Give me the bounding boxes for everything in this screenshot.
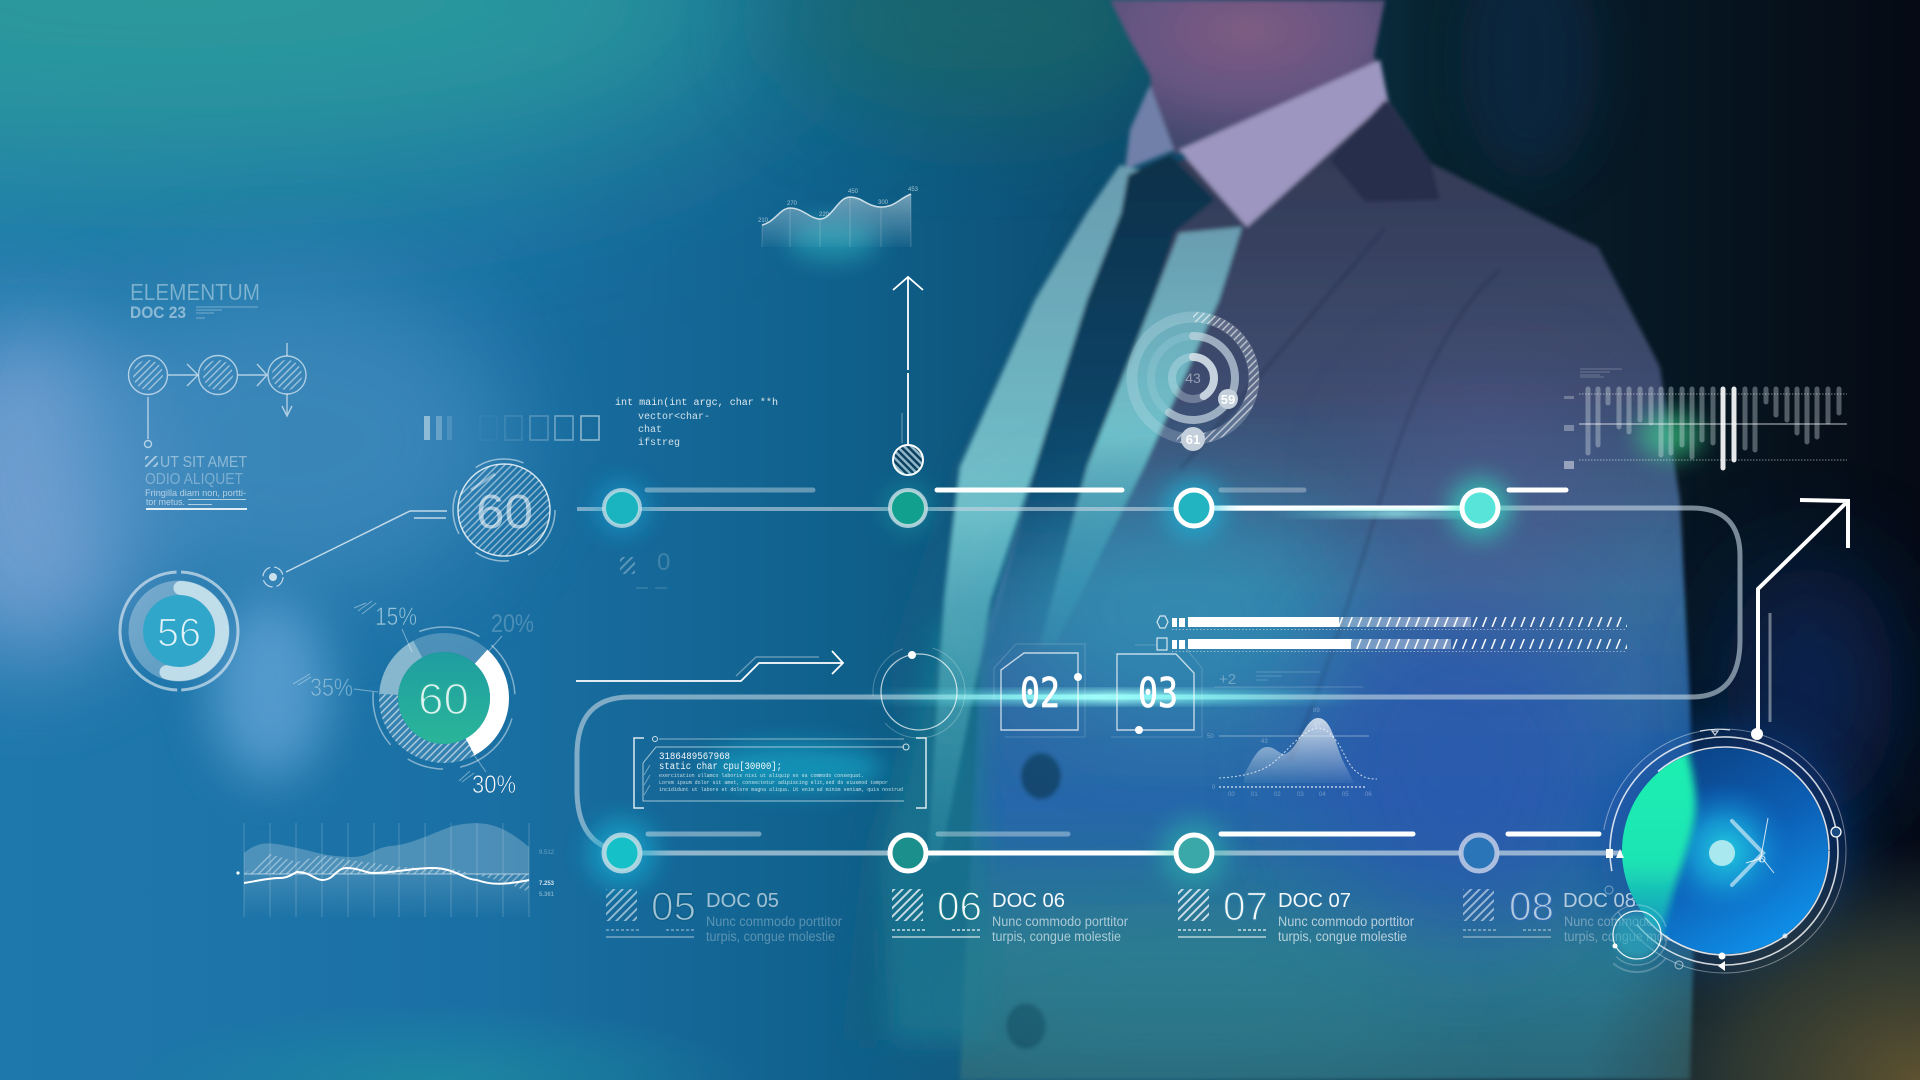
area line chart lower left: 9.512 bbox=[539, 850, 555, 856]
timeline node bottom 8 bbox=[1461, 835, 1497, 871]
node glows bbox=[588, 478, 1510, 887]
heading: ELEMENTUM DOC 23 bbox=[130, 279, 260, 322]
line chart top: 210 bbox=[758, 218, 769, 224]
faint +2 indicator bbox=[1214, 671, 1363, 688]
mountain chart: 03 bbox=[1297, 792, 1304, 798]
mountain chart: 43 bbox=[1261, 739, 1268, 745]
light overlays on suit bbox=[920, 380, 1920, 1080]
code panel: static char cpu: Lorem ipsum dolor sit amet, consectetur adipiscing elit,sed do eiusmod tempor bbox=[659, 780, 888, 786]
timeline node bottom 5 bbox=[604, 835, 640, 871]
code panel: static char cpu: 3186489567968 bbox=[659, 752, 730, 763]
line chart top: 453 bbox=[908, 187, 919, 193]
doc 08 label: Nunc commodo porttitor bbox=[1564, 914, 1700, 929]
heading: ELEMENTUM DOC 23: DOC 23 bbox=[130, 303, 186, 322]
text block: UT SIT AMET: tor metus. bbox=[146, 497, 185, 508]
gauge: 60 hatched with leader line bbox=[263, 459, 555, 587]
radial gauge: 43 59 61: 61 bbox=[1186, 432, 1200, 447]
doc 08 label: turpis, congue molestie bbox=[1564, 929, 1693, 944]
radial gauge: 43 59 61: 43 bbox=[1185, 370, 1201, 386]
gauge: 60 hatched with leader line: 60 bbox=[476, 486, 533, 539]
small lens bubble bbox=[1585, 883, 1689, 987]
lens green reflection bbox=[1622, 753, 1702, 934]
text block: UT SIT AMET: ODIO ALIQUET bbox=[145, 471, 243, 488]
line chart top: 270 bbox=[787, 201, 798, 207]
dial: big lens disc bbox=[1603, 728, 1846, 974]
doc 06 label: turpis, congue molestie bbox=[992, 929, 1121, 944]
code snippet: int main: ifstreg bbox=[638, 437, 680, 449]
lapel edge bbox=[1180, 228, 1500, 760]
mountain chart: 00 bbox=[1228, 792, 1235, 798]
track highlight bottom bbox=[908, 850, 1194, 856]
mountain chart: 06 bbox=[1365, 792, 1372, 798]
radial gauge: 43 59 61: 59 bbox=[1221, 392, 1235, 407]
area line chart lower left: 7.253 bbox=[539, 881, 555, 887]
hex box 02: 02 bbox=[1020, 669, 1060, 717]
code panel: static char cpu: incididunt ut labore et dolore magna aliqua. Ut enim ad minim veniam, quis nostrud bbox=[659, 787, 903, 793]
mountain chart: 67 bbox=[1314, 723, 1321, 729]
doc 05 label: 05 bbox=[651, 885, 696, 929]
text block: UT SIT AMET: Fringilla diam non, portti- bbox=[145, 488, 246, 499]
doc 07 label: 07 bbox=[1223, 885, 1268, 929]
doc 05 label: turpis, congue molestie bbox=[706, 929, 835, 944]
doc 06 label bbox=[892, 885, 1128, 944]
lens outer rings bbox=[1557, 684, 1891, 1018]
doc 06 label: 06 bbox=[937, 885, 982, 929]
doc 08 label: 08 bbox=[1509, 885, 1554, 929]
doc 07 label: DOC 07 bbox=[1278, 890, 1351, 912]
collar left bbox=[1125, 85, 1174, 170]
lens center marks bbox=[1709, 818, 1774, 885]
doc 07 label: Nunc commodo porttitor bbox=[1278, 914, 1414, 929]
line chart top bbox=[758, 187, 919, 260]
track highlight top bbox=[1194, 506, 1480, 510]
gauge: 56 bbox=[120, 572, 238, 690]
lapel dark bbox=[1330, 100, 1440, 202]
track glow bbox=[1270, 510, 1520, 517]
mountain chart: 05 bbox=[1342, 792, 1349, 798]
mountain chart: 0 bbox=[1212, 785, 1216, 791]
code snippet: int main bbox=[615, 397, 778, 449]
mountain chart: 89 bbox=[1313, 708, 1320, 714]
mountain chart: 04 bbox=[1319, 792, 1326, 798]
donut chart: 60 with percent labels: 60 bbox=[418, 675, 469, 724]
area line chart lower left bbox=[236, 823, 555, 918]
progress bars bbox=[1135, 616, 1627, 652]
text block: UT SIT AMET: UT SIT AMET bbox=[160, 454, 247, 471]
hex box 03 bbox=[1111, 646, 1202, 737]
bar chart upper right bbox=[1564, 369, 1847, 469]
radial gauge: 43 59 61 bbox=[1132, 317, 1254, 451]
photo: man in suit bbox=[850, 0, 1695, 1080]
donut chart: 60 with percent labels: 35% bbox=[310, 674, 353, 702]
doc 05 label: Nunc commodo porttitor bbox=[706, 914, 842, 929]
hex box 03: 03 bbox=[1138, 669, 1178, 717]
text block: UT SIT AMET bbox=[145, 454, 247, 509]
shirt left stripe bbox=[928, 165, 1142, 860]
code panel: static char cpu bbox=[634, 736, 926, 808]
arrow path to the right bbox=[576, 651, 843, 681]
doc 05 label bbox=[606, 885, 842, 944]
heading: ELEMENTUM DOC 23: ELEMENTUM bbox=[130, 279, 260, 305]
neck and chin bbox=[1110, 0, 1385, 155]
code panel: static char cpu: static char cpu[30000]; bbox=[659, 761, 782, 773]
mountain chart: 50 bbox=[1207, 734, 1214, 740]
timeline track bbox=[577, 508, 1740, 853]
small faded indicator: 0 bbox=[620, 549, 670, 588]
shirt right stripe bbox=[1040, 227, 1242, 645]
timeline node top 1 bbox=[604, 490, 640, 526]
line chart top: 300 bbox=[878, 200, 889, 206]
area line chart lower left: 5.361 bbox=[539, 892, 555, 898]
tie bbox=[985, 155, 1215, 660]
light beam on middle track bbox=[860, 691, 1360, 703]
timeline node top 2 bbox=[890, 490, 926, 526]
timeline node bottom 7 bbox=[1176, 835, 1212, 871]
lens core glow bbox=[1655, 781, 1795, 921]
donut chart: 60 with percent labels: 20% bbox=[491, 610, 534, 638]
timeline top bars bbox=[647, 490, 1599, 834]
gauge: 56: 56 bbox=[157, 611, 201, 655]
flow diagram: three hatched circles bbox=[128, 343, 306, 448]
faint +2 indicator: +2 bbox=[1219, 671, 1236, 688]
progress squares strip bbox=[424, 416, 599, 440]
hex box 02 bbox=[994, 644, 1085, 737]
doc 08 label bbox=[1463, 885, 1700, 944]
donut chart: 60 with percent labels: 30% bbox=[472, 771, 516, 799]
code panel: static char cpu: exercitation ullamco laboris nisi ut aliquip ex ea commodo consequat. bbox=[659, 773, 864, 779]
mountain chart: 02 bbox=[1274, 792, 1281, 798]
code snippet: int main: chat bbox=[638, 424, 662, 436]
line chart top: 220 bbox=[819, 212, 830, 218]
jacket button lower bbox=[1006, 1003, 1046, 1049]
mountain chart bbox=[1207, 708, 1377, 798]
donut chart: 60 with percent labels: 15% bbox=[375, 603, 417, 631]
small faded indicator: 0: 0 bbox=[657, 549, 670, 576]
dial ring bbox=[873, 646, 965, 738]
doc 06 label: DOC 06 bbox=[992, 890, 1065, 912]
timeline node top 4 bbox=[1462, 490, 1498, 526]
doc 07 label bbox=[1178, 885, 1414, 944]
jacket left panel bbox=[850, 170, 1120, 1040]
doc 06 label: Nunc commodo porttitor bbox=[992, 914, 1128, 929]
big arrow up right bbox=[1751, 500, 1848, 740]
code snippet: int main: int main(int argc, char **h bbox=[615, 397, 778, 409]
jacket bbox=[960, 95, 1695, 1080]
timeline node top 3 bbox=[1176, 490, 1212, 526]
mountain chart: 01 bbox=[1251, 792, 1258, 798]
jacket button upper bbox=[1021, 753, 1061, 799]
jacket front band bbox=[880, 620, 985, 1040]
arrow up with hatched circle bbox=[893, 277, 923, 475]
line chart top: 450 bbox=[848, 189, 859, 195]
doc 08 label: DOC 08 bbox=[1563, 890, 1636, 912]
code snippet: int main: vector<char- bbox=[638, 411, 710, 423]
collar right bbox=[1179, 60, 1388, 227]
doc 05 label: DOC 05 bbox=[706, 890, 779, 912]
doc 07 label: turpis, congue molestie bbox=[1278, 929, 1407, 944]
timeline node bottom 6 bbox=[890, 835, 926, 871]
donut chart: 60 with percent labels bbox=[293, 601, 534, 799]
lens markers bbox=[1606, 729, 1788, 971]
